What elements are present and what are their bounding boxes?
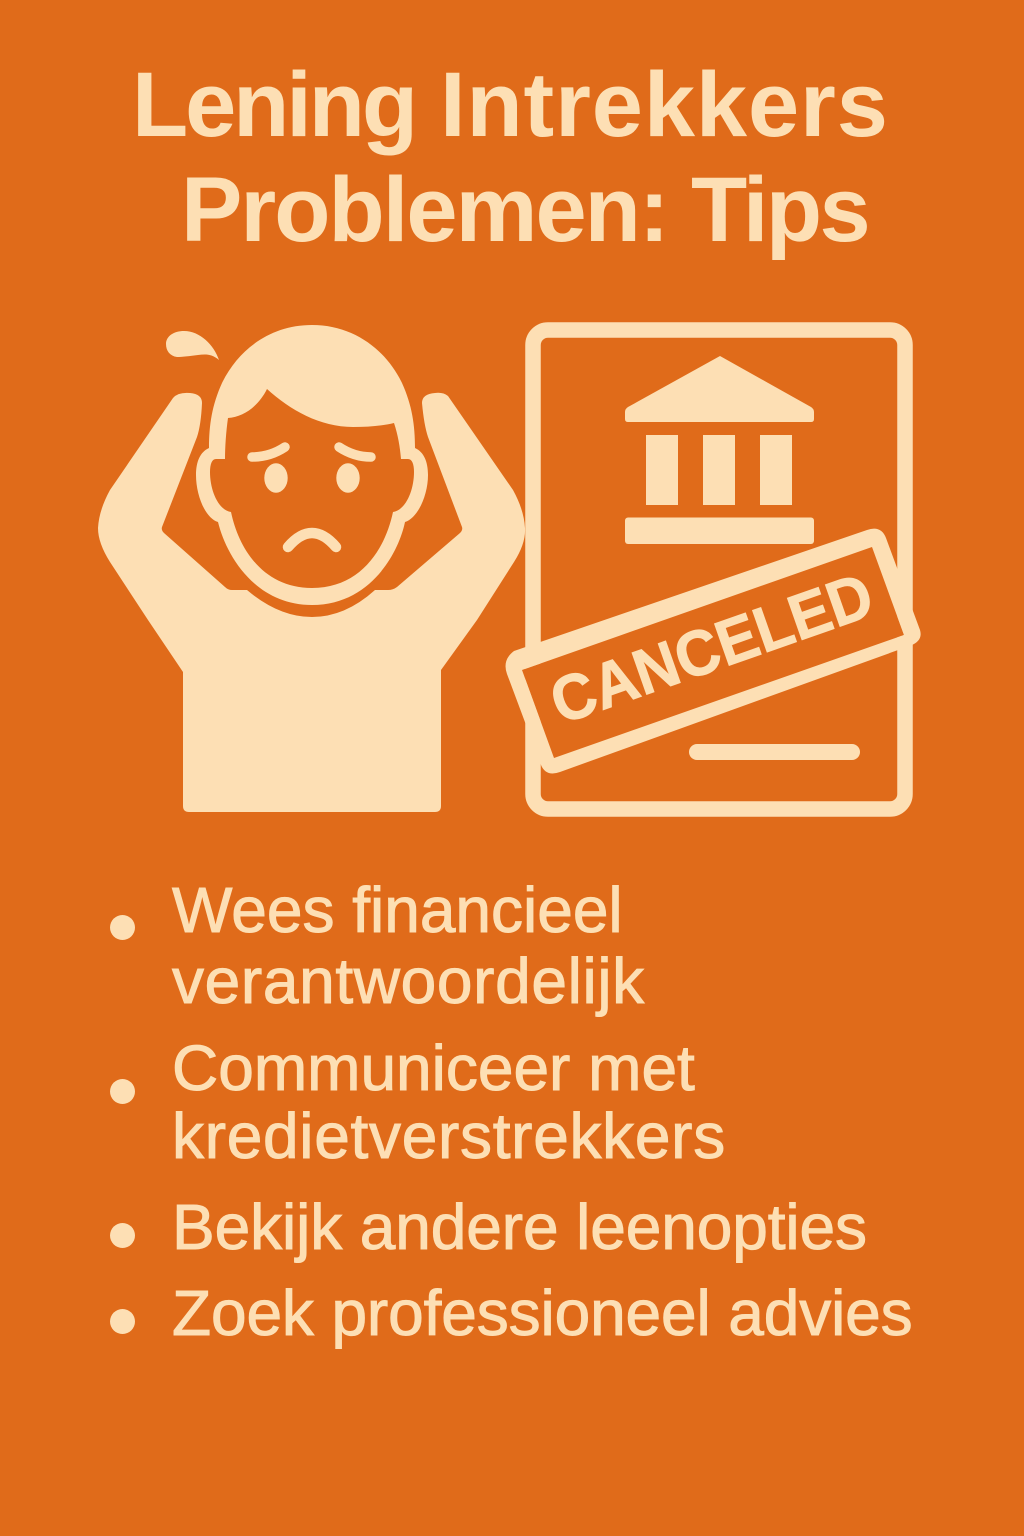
icon: stressed person (98, 325, 525, 812)
bullet: tip 2: kredietverstrekkers (172, 1100, 726, 1172)
bullet: tip 4: Zoek professioneel advies (172, 1277, 913, 1349)
bullet: tip 1: Wees financieel (172, 874, 623, 946)
icon: loan document with bank (533, 330, 905, 809)
title: Tips (691, 159, 868, 261)
bullet: tip 1 (110, 874, 646, 1017)
title: Problemen: (181, 159, 668, 261)
illustration (98, 322, 921, 817)
bullet: tip 2 (110, 1032, 726, 1172)
title (132, 54, 889, 261)
bullet: tip 1: verantwoordelijk (172, 945, 645, 1017)
title: Intrekkers (440, 54, 889, 156)
title: Lening (132, 54, 415, 156)
stamp: canceled (506, 529, 921, 773)
stamp: canceled: CANCELED (541, 558, 882, 738)
bullet: tip 2: Communiceer met (172, 1032, 695, 1104)
bullet: tip 3: Bekijk andere leenopties (172, 1191, 867, 1263)
